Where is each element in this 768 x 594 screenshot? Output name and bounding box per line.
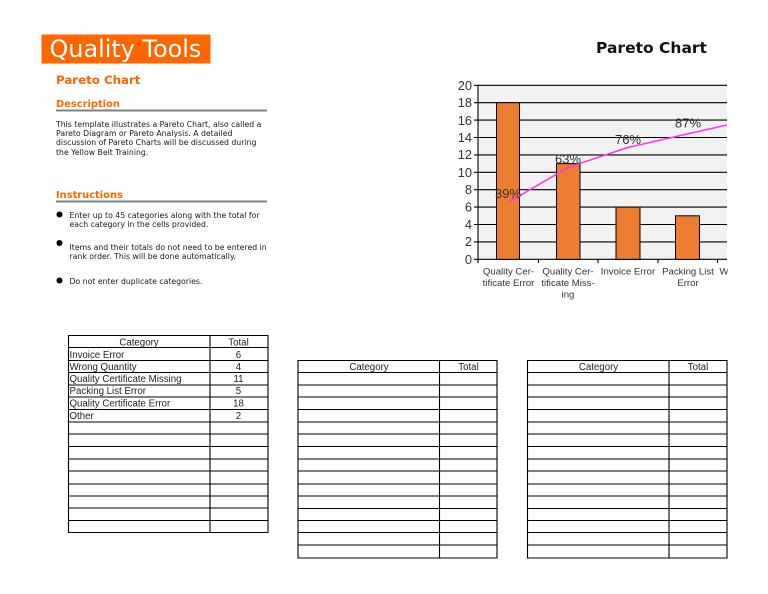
section: description: This template illustrates a Pareto Chart, also called a <box>55 120 262 129</box>
table 1: categories with data: 2 <box>236 411 241 422</box>
cumulative percent line <box>508 125 727 202</box>
x axis labels: tificate Error <box>483 278 535 289</box>
chart: Pareto bar chart with cumulative line <box>458 78 740 300</box>
y axis labels: 12 <box>458 147 472 162</box>
table 1: categories with data: Quality Certificate Error <box>70 398 171 410</box>
section: instructions: Instructions <box>56 190 123 201</box>
section: instructions: Items and their totals do not need to be entered in <box>70 243 267 252</box>
x axis labels <box>483 266 729 300</box>
percent labels <box>495 116 701 201</box>
y axis labels: 2 <box>465 234 472 249</box>
table 1: categories with data: 11 <box>233 374 244 385</box>
percent labels: 63% <box>555 152 581 166</box>
y axis labels: 0 <box>465 252 472 267</box>
table 1: categories with data: Total <box>228 338 249 348</box>
section: description: Description <box>56 99 120 110</box>
table 1: categories with data: Category <box>119 338 159 348</box>
table 1: categories with data: Invoice Error <box>70 350 125 361</box>
x axis labels: tificate Miss- <box>541 278 595 289</box>
table 1: categories with data: 6 <box>236 350 241 361</box>
y axis labels: 10 <box>458 165 472 180</box>
y axis labels: 14 <box>458 130 472 145</box>
table 1: categories with data <box>68 336 268 532</box>
x axis labels: Quality Cer- <box>542 266 594 278</box>
table 2: empty: Total <box>458 362 479 373</box>
section: description: the Yellow Belt Training. <box>56 148 148 157</box>
y axis labels: 4 <box>465 217 472 232</box>
x axis labels: Quality Cer- <box>483 266 534 278</box>
bar: Quality Certificate Error <box>496 103 520 259</box>
section: instructions: Enter up to 45 categories along with the total for <box>70 211 260 220</box>
section: instructions: rank order. This will be done automatically. <box>70 252 236 261</box>
x axis labels: Packing List <box>662 266 714 278</box>
section: description: discussion of Pareto Charts will be discussed during <box>56 138 256 147</box>
heading: Pareto Chart subtitle: Pareto Chart <box>56 73 141 87</box>
chart title: Pareto Chart <box>596 39 708 57</box>
percent labels: 87% <box>675 116 701 130</box>
table 1: categories with data: 4 <box>236 362 242 373</box>
percent labels: 76% <box>615 132 641 147</box>
percent labels: 39% <box>495 186 521 201</box>
bar: Quality Certificate Missing <box>556 164 580 259</box>
table 1: categories with data: Packing List Error <box>70 386 147 397</box>
table 1: categories with data: Quality Certificate Missing <box>70 374 181 385</box>
y axis labels <box>458 78 472 267</box>
section: description: Pareto Diagram or Pareto Analysis. A detailed <box>56 129 233 138</box>
table 2: empty: Category <box>349 362 389 373</box>
y axis labels: 20 <box>458 78 472 93</box>
section: instructions: each category in the cells provided. <box>70 220 208 229</box>
x axis labels: ing <box>562 290 574 300</box>
section: instructions <box>56 190 267 286</box>
y axis labels: 16 <box>458 113 472 128</box>
table 1: categories with data: Other <box>70 411 95 422</box>
section: description <box>55 99 267 157</box>
table 1: categories with data: 18 <box>233 398 244 410</box>
bar: Invoice Error <box>616 207 640 259</box>
table 3: empty <box>528 360 727 558</box>
x axis labels: Invoice Error <box>601 266 656 278</box>
y axis labels: 6 <box>465 200 472 214</box>
table 1: categories with data: 5 <box>236 386 241 397</box>
y axis labels: 18 <box>458 95 472 110</box>
bar: Packing List Error <box>676 216 700 259</box>
table 1: categories with data: Wrong Quantity <box>70 362 137 373</box>
section: instructions: Do not enter duplicate categories. <box>70 277 202 286</box>
table 3: empty: Total <box>688 362 708 373</box>
table 3: empty: Category <box>579 362 618 373</box>
x axis labels: W <box>719 266 729 278</box>
table 2: empty <box>298 360 497 558</box>
y axis labels: 8 <box>465 182 472 197</box>
title: Quality Tools banner: Quality Tools <box>50 35 201 63</box>
x axis labels: Error <box>677 278 699 289</box>
